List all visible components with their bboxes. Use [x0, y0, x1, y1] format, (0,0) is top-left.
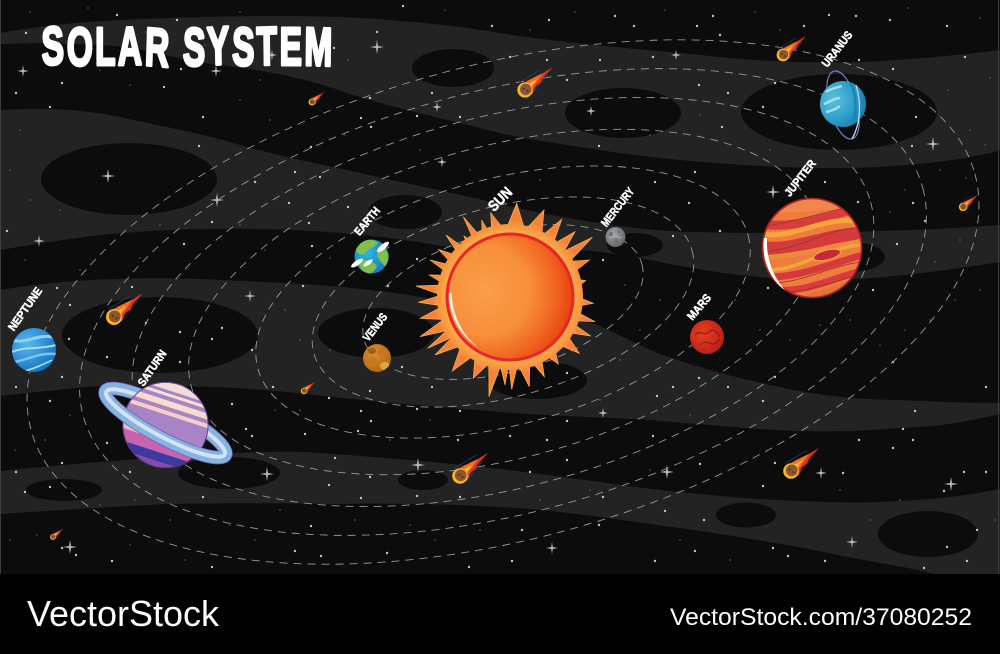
- watermark logo text: VectorStock: [27, 593, 220, 634]
- comet 3: [106, 293, 143, 325]
- label: Saturn: SATURN: [136, 348, 169, 389]
- label: Mars: MARS: [686, 292, 714, 323]
- planet: Saturn: [98, 382, 233, 468]
- planet: Mars: [690, 320, 724, 354]
- planet labels: [7, 29, 856, 389]
- comet 7: [452, 453, 488, 484]
- Saturn back ring: [98, 378, 233, 468]
- sun disc: [447, 234, 573, 360]
- label: Sun: SUN: [485, 184, 516, 215]
- planet: Venus: [363, 344, 391, 372]
- watermark bar: [0, 574, 1000, 654]
- planet: Earth: [350, 240, 390, 275]
- label: Neptune: NEPTUNE: [7, 285, 45, 333]
- planet: Neptune: [12, 328, 56, 372]
- Saturn globe: [122, 382, 208, 468]
- watermark id text: VectorStock.com/37080252: [670, 604, 972, 631]
- planet: Mercury: [606, 227, 626, 247]
- sun highlight: [449, 293, 478, 347]
- sun corona ring: [437, 224, 583, 370]
- label: Jupiter: JUPITER: [783, 158, 819, 199]
- title: SOLAR SYSTEM: [41, 14, 333, 79]
- label: Mercury: MERCURY: [599, 186, 637, 229]
- comet 8: [783, 448, 819, 479]
- comet 1: [777, 36, 806, 61]
- comet 2: [517, 67, 553, 98]
- comet 6: [301, 382, 316, 394]
- Saturn front ring: [98, 391, 226, 468]
- label: Earth: EARTH: [353, 205, 383, 238]
- label: Venus: VENUS: [361, 311, 391, 344]
- comets: [50, 36, 978, 540]
- label: Uranus: URANUS: [820, 29, 856, 70]
- planet: Jupiter: [760, 197, 866, 299]
- sun corona spikes: [416, 203, 595, 397]
- dark crater patches: [26, 49, 978, 557]
- planet: Uranus: [820, 68, 866, 142]
- sun: [416, 203, 595, 397]
- comet 5: [959, 195, 978, 211]
- comet 9: [50, 528, 63, 540]
- comet 4: [308, 92, 325, 106]
